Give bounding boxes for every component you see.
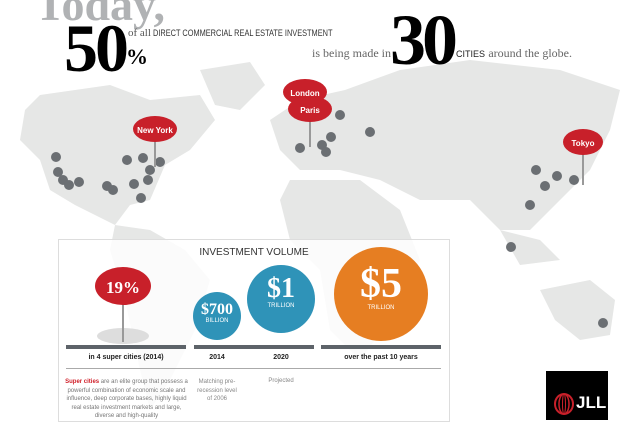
red pin: New York (133, 116, 177, 167)
red pin: Paris: Paris (300, 106, 320, 115)
panel: investment volume (58, 239, 450, 422)
circle $700 billion: BILLION (205, 318, 228, 324)
red pin: London: London (290, 89, 320, 98)
headline cities: CITIES around the globe. (456, 46, 572, 60)
19% pin: 19% (106, 278, 140, 297)
headline text line 2: is being made in (312, 46, 391, 60)
19% pin (95, 267, 151, 344)
headline text line 1: DIRECT COMMERCIAL REAL ESTATE INVESTMENT (153, 28, 333, 38)
red pin: Tokyo: Tokyo (572, 139, 595, 148)
super cities description: Super cities are an elite group that possess a powerful combination of economic scale and influence, deep corporate bases, highly liquid real estate investment markets and large, diverse and high-quality (65, 379, 188, 419)
panel: investment volume: 2020 (273, 354, 289, 361)
bars (66, 345, 186, 349)
red pin: Tokyo (563, 129, 603, 185)
circle $1 trillion: $1 (267, 273, 295, 304)
red pin: New York: New York (137, 126, 173, 135)
panel heading: INVESTMENT VOLUME (199, 247, 309, 258)
headline text line 1: of all (128, 27, 151, 39)
circle $5 trillion: TRILLION (367, 305, 394, 311)
red pin: Paris (288, 98, 332, 147)
circle $700 billion (193, 292, 241, 340)
circle $700 billion: $700 (201, 301, 233, 318)
matching note: Matching pre-recession level of 2006 (197, 379, 237, 402)
circle $1 trillion (247, 265, 315, 333)
projected note: Projected (268, 378, 294, 384)
panel: investment volume: over the past 10 years (344, 354, 418, 361)
circle $5 trillion (334, 247, 428, 341)
circle $5 trillion: $5 (360, 261, 402, 307)
red pin: London (283, 79, 327, 102)
headline 30: 30 (390, 0, 454, 80)
headline 50%: 50 (64, 10, 126, 86)
circle $1 trillion: TRILLION (267, 303, 294, 309)
panel: investment volume: 2014 (209, 354, 225, 361)
text: % (126, 44, 148, 69)
JLL logo: JLL (576, 393, 606, 412)
labels: in 4 super cities (2014) (88, 354, 164, 361)
JLL logo (546, 371, 608, 420)
